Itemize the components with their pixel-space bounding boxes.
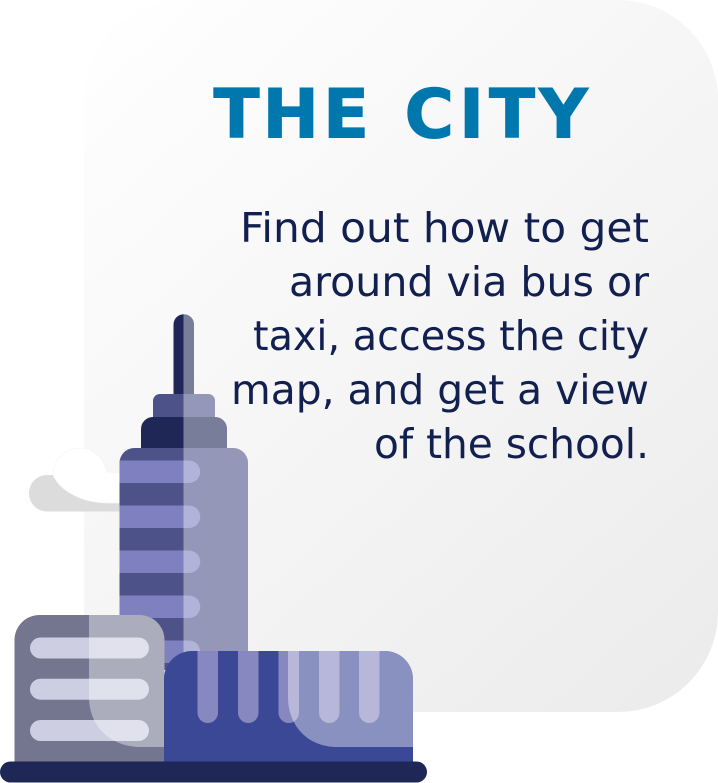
building highlight xyxy=(288,651,413,747)
text block: description: map, and get a view xyxy=(231,366,649,414)
text block: description xyxy=(231,204,649,468)
tower highlight xyxy=(184,314,248,670)
icon: tall tower xyxy=(120,314,248,670)
building highlight xyxy=(89,615,164,747)
text block: description: of the school. xyxy=(374,420,649,468)
icon: cloud xyxy=(29,448,139,512)
ground bar xyxy=(0,762,427,782)
title: THE CITY xyxy=(214,74,589,154)
tower window stripes xyxy=(120,460,200,663)
text block: description: Find out how to get xyxy=(240,204,649,252)
icon: left building xyxy=(14,615,164,765)
text block: description: taxi, access the city xyxy=(253,312,649,360)
icon: right building xyxy=(164,651,413,765)
building columns xyxy=(198,651,380,723)
building windows xyxy=(30,638,149,741)
text block: description: around via bus or xyxy=(289,258,649,306)
